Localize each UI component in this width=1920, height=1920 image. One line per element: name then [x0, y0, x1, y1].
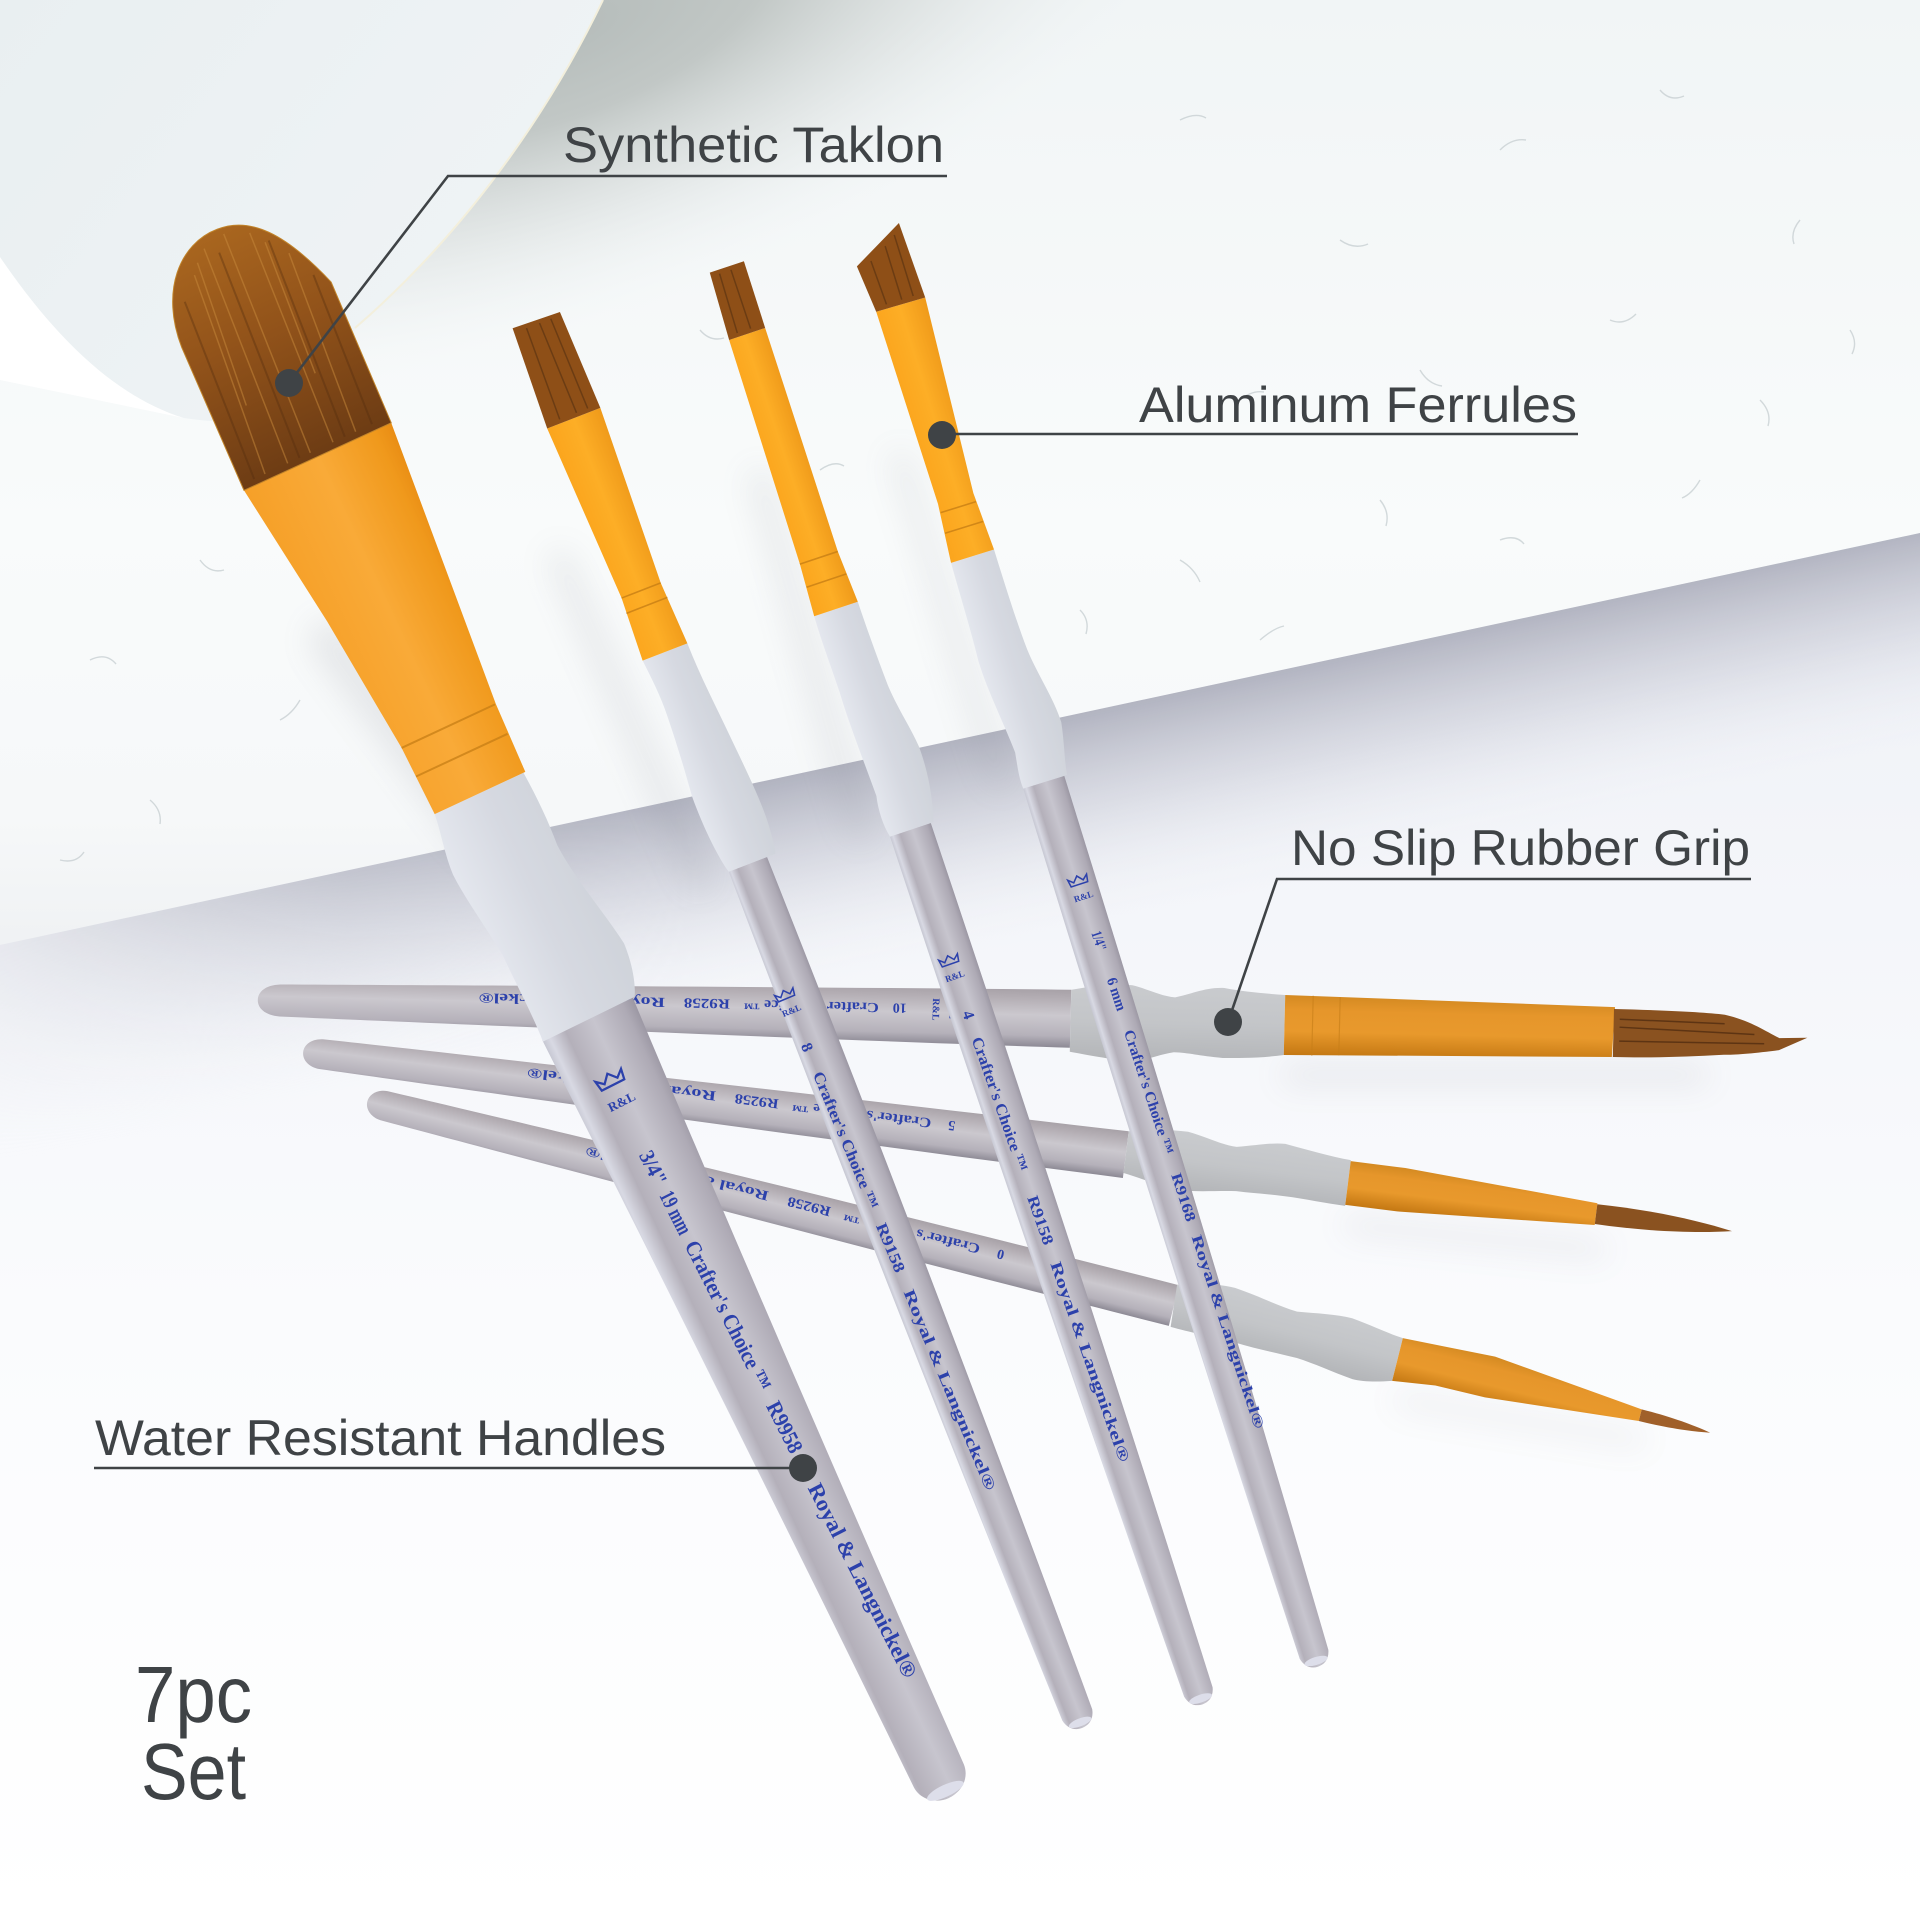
imprint: 1/4"	[1087, 929, 1109, 953]
bristles	[707, 261, 766, 340]
handle	[728, 857, 1103, 1736]
imprint: R9958	[761, 1397, 808, 1457]
bristles	[1595, 1204, 1733, 1241]
ferrule rings	[402, 704, 508, 777]
imprint: R&L	[929, 998, 941, 1021]
set count label: 7pc	[135, 1650, 252, 1739]
bristle streaks	[166, 212, 369, 474]
imprint: 3/4"	[634, 1146, 673, 1190]
callout: Aluminum Ferrules	[928, 377, 1578, 449]
imprint	[594, 1067, 926, 1682]
background: shadow cast by the paper on the table	[0, 533, 1920, 1036]
label text: Water Resistant Handles	[95, 1410, 666, 1466]
imprint: R9258	[734, 1090, 779, 1110]
brush: flat 4	[700, 257, 1236, 1712]
ferrule ring	[939, 501, 983, 533]
imprint	[584, 1142, 1006, 1262]
brush: top horizontal round	[257, 963, 1808, 1078]
imprint	[938, 953, 1134, 1465]
background: table surface	[0, 533, 1920, 1920]
imprint	[526, 1064, 956, 1133]
brush: flat 8	[509, 307, 1115, 1738]
brush: large filbert	[139, 195, 1022, 1834]
grip	[1070, 983, 1285, 1065]
handle	[300, 1028, 1129, 1178]
brush: bottom horizontal round	[360, 1072, 1716, 1467]
imprint: 6 mm	[1103, 976, 1129, 1013]
set count label	[135, 1650, 252, 1816]
imprint: R9158	[1023, 1194, 1056, 1247]
label text: No Slip Rubber Grip	[1291, 820, 1750, 876]
label text: Aluminum Ferrules	[1139, 377, 1577, 433]
imprint: Crafter's Choice ™	[680, 1236, 777, 1395]
ferrule	[722, 328, 858, 616]
leader line	[942, 433, 1578, 435]
imprint: R&L	[1072, 889, 1095, 904]
marker dot	[789, 1454, 817, 1482]
bristles	[848, 222, 925, 314]
imprint: R9258	[786, 1193, 832, 1218]
callout: Synthetic Taklon	[275, 117, 947, 397]
grip	[1122, 1124, 1352, 1211]
marker dot	[1214, 1008, 1242, 1036]
grip	[427, 765, 647, 1046]
bristles	[509, 309, 600, 428]
marker dot	[275, 369, 303, 397]
background: paper sheet	[0, 0, 1920, 960]
leader line	[1228, 879, 1751, 1022]
imprint	[774, 987, 1000, 1494]
soft brush shadows	[330, 460, 1700, 1440]
handle end cap	[925, 1777, 966, 1805]
grip	[640, 639, 780, 874]
imprint: Royal & Langnickel®	[1188, 1233, 1266, 1431]
imprint: R&L	[944, 968, 966, 984]
imprint: Royal & Langnickel®	[478, 989, 665, 1009]
imprint: 19 mm	[655, 1186, 698, 1239]
handle	[1023, 776, 1339, 1673]
leader line	[289, 176, 947, 383]
brush: angled flat	[847, 221, 1351, 1674]
handle	[257, 970, 1071, 1048]
callout: Water Resistant Handles	[94, 1410, 817, 1482]
ferrule	[244, 422, 549, 829]
imprint: 5	[947, 1117, 956, 1133]
imprint: Crafter's Choice ™	[968, 1035, 1030, 1174]
imprint: Royal & Langnickel®	[584, 1142, 770, 1203]
handle end cap	[1188, 1691, 1213, 1706]
handle	[890, 823, 1223, 1711]
background: paper fibres	[60, 60, 1855, 861]
leader line	[94, 1467, 803, 1469]
background: white area under the flap	[0, 257, 184, 418]
marker dot	[928, 421, 956, 449]
set count label: Set	[141, 1727, 246, 1816]
imprint: R&L	[780, 1002, 803, 1019]
handle end cap	[1303, 1654, 1329, 1668]
ferrule	[1392, 1334, 1645, 1441]
handle	[542, 998, 996, 1818]
imprint: Crafter's Choice ™	[791, 1097, 932, 1130]
imprint	[1067, 873, 1268, 1432]
ferrule	[1345, 1161, 1599, 1236]
imprint: Crafter's Choice ™	[809, 1069, 881, 1212]
imprint: Royal & Langnickel®	[526, 1064, 717, 1103]
imprint: 4	[959, 1009, 977, 1022]
ferrule	[547, 408, 691, 662]
imprint: R9158	[872, 1221, 908, 1275]
imprint: Royal & Langnickel®	[1046, 1260, 1132, 1464]
label text: Synthetic Taklon	[563, 117, 944, 173]
imprint: 0	[996, 1245, 1006, 1262]
imprint: Royal & Langnickel®	[803, 1479, 922, 1682]
ferrule	[873, 297, 1003, 563]
handle end cap	[1068, 1714, 1093, 1730]
imprint: R9258	[684, 994, 730, 1010]
background: curled paper flap	[0, 0, 603, 422]
imprint: R&L	[605, 1088, 638, 1115]
grip	[814, 598, 943, 837]
flap edge highlight	[355, 0, 603, 328]
ferrule	[1284, 995, 1615, 1063]
callout: No Slip Rubber Grip	[1214, 820, 1751, 1036]
imprint: R9168	[1167, 1171, 1198, 1224]
bristles	[139, 195, 396, 491]
imprint: Royal & Langnickel®	[900, 1287, 998, 1493]
ferrule ring	[799, 551, 846, 587]
imprint: Crafter's Choice ™	[842, 1207, 982, 1256]
grip	[1165, 1274, 1405, 1389]
background: grey shadow beside the curled flap	[0, 0, 1500, 520]
brush: middle horizontal round	[300, 1021, 1736, 1259]
bristles	[1613, 1009, 1808, 1062]
imprint: Crafter's Choice ™	[744, 996, 879, 1014]
ferrule ring	[621, 583, 667, 613]
imprint: Crafter's Choice ™	[1120, 1028, 1176, 1156]
bristles	[1639, 1409, 1712, 1438]
grip	[948, 546, 1077, 790]
imprint: 10	[893, 999, 907, 1015]
imprint	[478, 987, 958, 1021]
imprint: 8	[797, 1041, 816, 1055]
handle	[362, 1083, 1179, 1326]
